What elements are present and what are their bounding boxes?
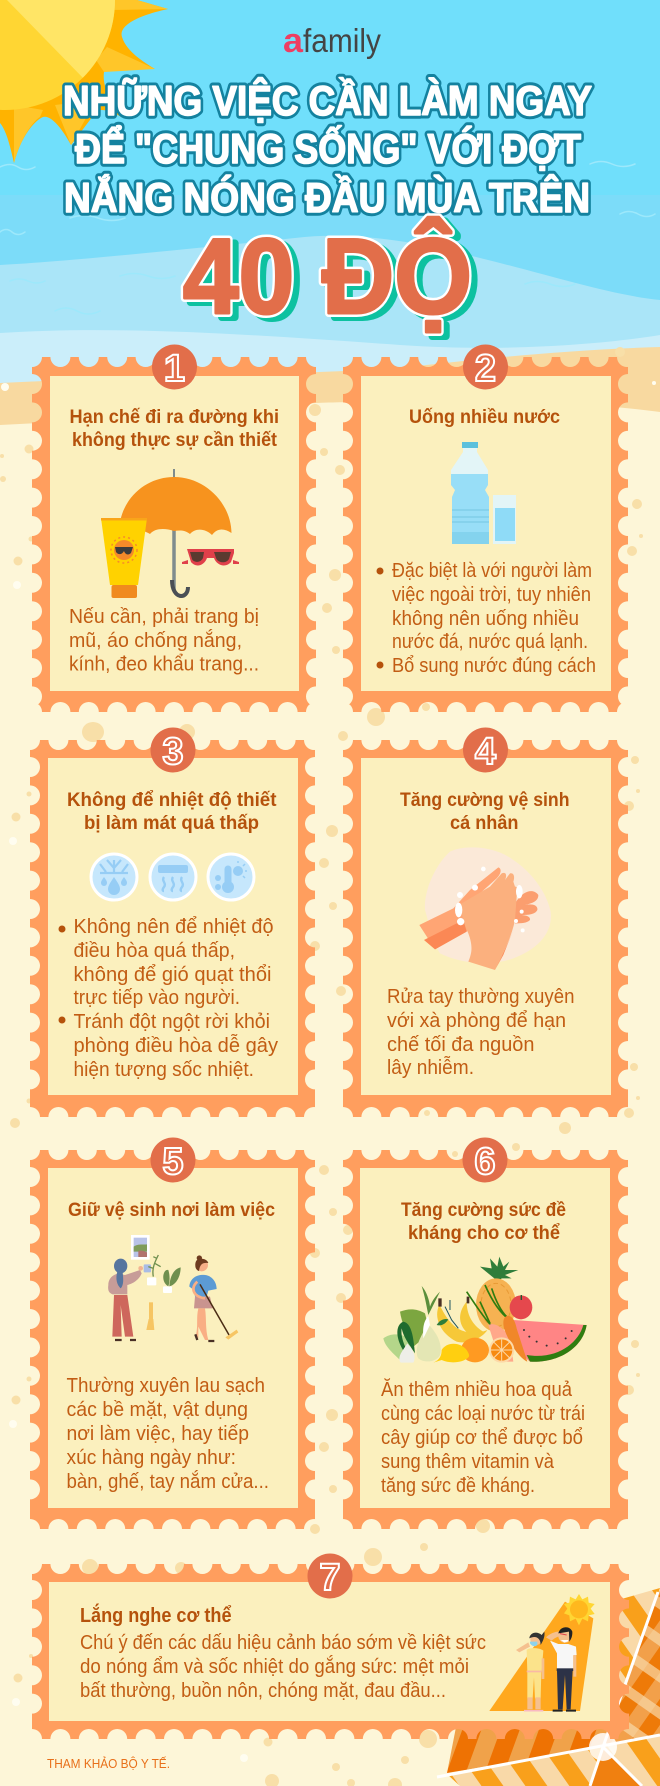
heading 1: Hạn chế đi ra đường khi [70, 407, 279, 428]
number 5 [150, 1138, 196, 1183]
text 3: không để gió quạt thổi [74, 964, 272, 986]
text 5 [66, 1375, 269, 1493]
text 3: điều hòa quá thấp, [74, 940, 235, 962]
text 1: Nếu cần, phải trang bị [69, 606, 259, 628]
text 1: kính, đeo khẩu trang... [69, 654, 259, 676]
text 6: tăng sức đề kháng. [381, 1475, 535, 1497]
number 7 [308, 1554, 352, 1599]
heading: 40 độ: 40 ĐỘ [183, 216, 472, 336]
text 6: sung thêm vitamin và [381, 1451, 555, 1473]
panel: 2 [343, 344, 628, 712]
heading 4: Tăng cường vệ sinh [400, 790, 570, 811]
icon: people cleaning [108, 1235, 238, 1341]
heading: 40 độ: 40 ĐỘ [189, 220, 478, 340]
text 3: trực tiếp vào người. [74, 987, 240, 1009]
text 3: phòng điều hòa dễ gây [74, 1034, 278, 1057]
heading 6: kháng cho cơ thể [408, 1223, 560, 1244]
text 1: mũ, áo chống nắng, [69, 629, 242, 652]
beach umbrella corner [437, 1588, 660, 1786]
text 2: nước đá, nước quá lạnh. [392, 631, 588, 653]
text 4 [387, 986, 574, 1079]
icon: washing hands [419, 847, 551, 970]
heading 6: Tăng cường sức đề [401, 1200, 566, 1221]
number 6 [462, 1138, 508, 1183]
text 4: với xà phòng để hạn [387, 1010, 566, 1032]
heading 2: Uống nhiều nước [409, 407, 560, 428]
number 2 [463, 344, 508, 390]
heading 4: cá nhân [450, 813, 518, 834]
text 4: chế tối đa nguồn [387, 1034, 534, 1056]
number 1 [152, 344, 197, 390]
title: ĐỂ "CHUNG SỐNG" VỚI ĐỢT [75, 124, 581, 172]
icon: water bottle and glass [451, 442, 516, 544]
text 3: hiện tượng sốc nhiệt. [74, 1059, 254, 1081]
text 1 [69, 606, 259, 676]
panel: 7 [32, 1554, 629, 1739]
title: NẮNG NÓNG ĐẦU MÙA TRÊN [64, 173, 590, 221]
heading: 40 độ: 40 ĐỘ [183, 216, 472, 336]
text 2: việc ngoài trời, tuy nhiên [392, 584, 591, 606]
number 3 [150, 728, 196, 773]
icon: frost [91, 854, 137, 900]
text 5: các bề mặt, vật dụng [66, 1399, 248, 1421]
heading 1: không thực sự cần thiết [72, 430, 278, 451]
panel: 4 [343, 728, 628, 1117]
heading 3 [67, 790, 277, 834]
text 2 [376, 560, 596, 677]
text 5: bàn, ghế, tay nắm cửa... [66, 1470, 269, 1493]
icon: sun [0, 0, 168, 163]
number 4: 4 [475, 731, 496, 773]
heading 5: Giữ vệ sinh nơi làm việc [68, 1200, 275, 1221]
text 5: xúc hàng ngày như: [66, 1447, 236, 1469]
logo: afamily: family [303, 22, 381, 59]
source note: THAM KHẢO BỘ Y TẾ. [47, 1756, 170, 1771]
icon: people in the sun [489, 1594, 595, 1711]
panel: 1 [32, 344, 316, 712]
heading 3: Không để nhiệt độ thiết [67, 790, 277, 811]
heading 4 [400, 790, 570, 834]
text 5: nơi làm việc, hay tiếp [66, 1423, 249, 1445]
text 7: bất thường, buồn nôn, chóng mặt, đau đầu... [80, 1680, 446, 1702]
text 2: không nên uống nhiều [392, 608, 579, 630]
text 3 [58, 916, 278, 1081]
text 2: Bổ sung nước đúng cách [392, 655, 596, 677]
text 3: Không nên để nhiệt độ [74, 916, 274, 938]
icon: umbrella, sunscreen, sunglasses [101, 469, 239, 598]
title [63, 76, 592, 221]
panel: 6 [343, 1138, 628, 1529]
number 2: 2 [475, 348, 496, 390]
heading 3: bị làm mát quá thấp [84, 813, 259, 834]
text 3: Tránh đột ngột rời khỏi [74, 1011, 270, 1033]
number 7: 7 [319, 1557, 341, 1599]
number 1: 1 [164, 348, 185, 390]
text 6: Ăn thêm nhiều hoa quả [381, 1378, 573, 1401]
number 6: 6 [474, 1141, 496, 1183]
title: NẮNG NÓNG ĐẦU MÙA TRÊN [64, 173, 590, 221]
text 7: do nóng ẩm và sốc nhiệt do gắng sức: mệt mỏi [80, 1655, 469, 1678]
icon: fruits and vegetables [383, 1257, 587, 1363]
panel: 5 [30, 1138, 315, 1529]
title: NHỮNG VIỆC CẦN LÀM NGAY [63, 76, 592, 124]
text 7 [80, 1632, 486, 1702]
number 3: 3 [162, 731, 184, 773]
number 4 [463, 728, 508, 773]
text 6: cùng các loại nước từ trái [381, 1403, 585, 1425]
heading 6 [401, 1200, 566, 1244]
text 5: Thường xuyên lau sạch [66, 1375, 265, 1397]
text 4: Rửa tay thường xuyên [387, 986, 574, 1008]
title: ĐỂ "CHUNG SỐNG" VỚI ĐỢT [75, 124, 581, 172]
title: NHỮNG VIỆC CẦN LÀM NGAY [63, 76, 592, 124]
panel: 3 [30, 728, 315, 1117]
text 2: Đặc biệt là với người làm [392, 560, 592, 582]
text 4: lây nhiễm. [387, 1056, 474, 1079]
logo: afamily: a [283, 22, 304, 60]
text 7: Chú ý đến các dấu hiệu cảnh báo sớm về kiệt sức [80, 1632, 486, 1654]
text 6: cây giúp cơ thể được bổ [381, 1427, 583, 1449]
icon: thermometer [208, 854, 254, 900]
heading 7: Lắng nghe cơ thể [80, 1603, 232, 1627]
number 5: 5 [162, 1141, 184, 1183]
icon: air conditioner [150, 854, 196, 900]
heading 1 [70, 407, 279, 451]
text 6 [381, 1378, 585, 1497]
